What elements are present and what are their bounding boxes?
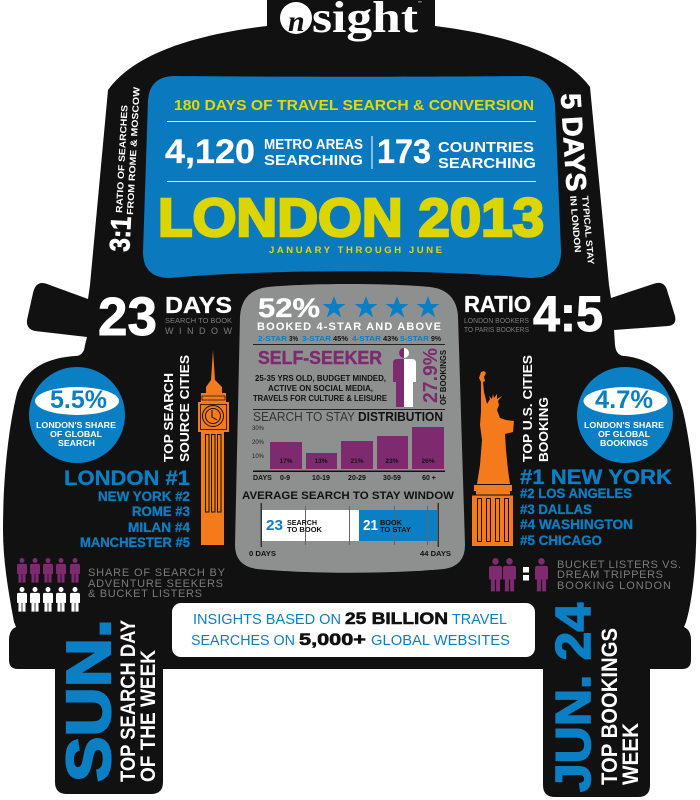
heading: top US cities booking: BOOKING bbox=[536, 397, 551, 462]
bar chart: search to stay distribution: 30-59 bbox=[383, 475, 401, 482]
star rating breakdown: 5-STAR bbox=[400, 334, 430, 343]
bar chart: search to stay distribution: DAYS bbox=[253, 475, 272, 482]
badge: share of global bookings: OF GLOBAL bbox=[598, 429, 650, 439]
list: top US cities bbox=[520, 466, 672, 548]
stat: metro areas bbox=[165, 133, 363, 171]
panel: windshield bbox=[143, 76, 561, 278]
list: top search source cities: MILAN #4 bbox=[128, 519, 190, 535]
callout: insights: 5,000+ bbox=[299, 630, 366, 649]
stat: countries: 173 bbox=[377, 133, 431, 171]
badge: share of global search: 5.5% bbox=[50, 386, 107, 414]
stat: June 24 top bookings week: WEEK bbox=[618, 723, 643, 785]
stat: countries: COUNTRIES bbox=[438, 139, 534, 156]
text: share of search: ADVENTURE SEEKERS bbox=[88, 578, 223, 590]
list: top US cities: #1 NEW YORK bbox=[520, 466, 672, 489]
persona: self-seeker: ACTIVE ON SOCIAL MEDIA, bbox=[268, 384, 373, 393]
stat: metro areas: METRO AREAS bbox=[264, 136, 363, 153]
heading: top search source cities: TOP SEARCH bbox=[161, 373, 176, 462]
timeline bar: search to stay window: 23 bbox=[266, 517, 283, 534]
icon: Big Ben bbox=[198, 350, 229, 545]
bar chart: search to stay distribution: 30% bbox=[252, 426, 265, 432]
stat: ratio 4:5: RATIO bbox=[464, 291, 531, 317]
panel: grey centre dashboard bbox=[235, 284, 465, 573]
badge: share of global bookings: 4.7% bbox=[595, 386, 653, 414]
chart heading: DISTRIBUTION bbox=[358, 409, 443, 424]
badge: share of global bookings: BOOKINGS bbox=[600, 438, 648, 448]
heading: top US cities booking bbox=[520, 355, 551, 462]
star rating breakdown: 3-STAR bbox=[302, 334, 332, 343]
text: bucket listers: DREAM TRIPPERS bbox=[557, 569, 663, 581]
stat: 52 percent: 52% bbox=[258, 293, 320, 323]
list: top search source cities: MANCHESTER #5 bbox=[80, 534, 190, 550]
icon group: purple and white people bbox=[17, 558, 80, 612]
stat: 3:1 ratio: FROM ROME & MOSCOW bbox=[125, 86, 142, 215]
logo bbox=[280, 0, 422, 42]
heading: average search to stay window: AVERAGE SEARCH TO STAY WINDOW bbox=[242, 490, 455, 502]
persona: self-seeker: SELF-SEEKER bbox=[258, 348, 382, 368]
stat: 23 days: WINDOW bbox=[165, 326, 232, 336]
stat: 23 days bbox=[98, 287, 232, 347]
text: bucket listers: BOOKING LONDON bbox=[557, 580, 671, 592]
bar chart: search to stay distribution bbox=[252, 426, 445, 482]
stat: June 24 top bookings week bbox=[547, 603, 643, 792]
callout: insights: INSIGHTS BASED ON bbox=[193, 611, 341, 628]
stat: 3:1 ratio bbox=[104, 86, 142, 252]
badge: share of global search: SEARCH bbox=[58, 438, 95, 448]
title: London 2013: LONDON 2013 bbox=[158, 188, 544, 248]
list: top search source cities: ROME #3 bbox=[132, 503, 190, 519]
list: top US cities: #3 DALLAS bbox=[520, 501, 592, 517]
logo: n bbox=[288, 5, 305, 38]
stat: ratio 4:5: LONDON BOOKERS bbox=[464, 318, 529, 325]
icon: half-filled person bbox=[393, 348, 416, 407]
badge: share of global search bbox=[29, 367, 125, 463]
text: bucket listers: BUCKET LISTERS VS. bbox=[557, 559, 681, 571]
bar chart: search to stay distribution: 0-9 bbox=[280, 475, 290, 482]
persona: self-seeker: 25-35 YRS OLD, BUDGET MINDED, bbox=[255, 374, 386, 383]
stat: 3:1 ratio: 3:1 bbox=[104, 216, 137, 252]
stat: 23 days: SEARCH TO BOOK bbox=[165, 316, 232, 325]
stat: 23 days: DAYS bbox=[165, 292, 232, 318]
star rating breakdown: 9% bbox=[431, 334, 441, 343]
callout: insights: 25 BILLION bbox=[345, 609, 448, 628]
badge: share of global search: LONDON'S SHARE bbox=[36, 420, 116, 430]
stat: 5 days: IN LONDON bbox=[568, 195, 583, 253]
star rating breakdown: 2-STAR bbox=[258, 334, 288, 343]
stat: June 24 top bookings week: TOP BOOKINGS bbox=[597, 628, 622, 785]
stat: 5 days: 5 DAYS bbox=[555, 92, 592, 192]
subtitle: dates: JANUARY THROUGH JUNE bbox=[269, 245, 442, 256]
stat: 3:1 ratio: RATIO OF SEARCHES bbox=[114, 105, 130, 213]
list: top search source cities: LONDON #1 bbox=[64, 467, 190, 490]
text: share of search bbox=[88, 567, 226, 600]
icon: Statue of Liberty bbox=[472, 371, 514, 546]
list: top US cities: #2 LOS ANGELES bbox=[520, 485, 632, 501]
icon group: bucket listers vs dream trippers bbox=[489, 558, 548, 591]
stat: Sunday top search day bbox=[55, 619, 160, 782]
stat: countries bbox=[377, 133, 536, 172]
star rating breakdown: 43% bbox=[383, 334, 398, 343]
stat: 27.9 percent of bookings: 27.9% bbox=[420, 348, 442, 403]
text: share of search: & BUCKET LISTERS bbox=[88, 588, 202, 600]
bar chart: search to stay distribution: 10-19 bbox=[312, 475, 330, 482]
timeline bar: search to stay window: 44 DAYS bbox=[420, 549, 451, 558]
timeline bar: search to stay window: BOOK bbox=[380, 518, 403, 527]
stat: 23 days: 23 bbox=[98, 287, 157, 347]
bar chart: search to stay distribution: 10% bbox=[252, 454, 265, 460]
heading: top search source cities: SOURCE CITIES bbox=[177, 355, 192, 462]
badge: share of global search: OF GLOBAL bbox=[50, 429, 102, 439]
persona: self-seeker: TRAVELS FOR CULTURE & LEISURE bbox=[253, 394, 388, 403]
chart heading: SEARCH TO STAY bbox=[253, 409, 355, 424]
star rating breakdown: 4-STAR bbox=[352, 334, 382, 343]
stat: ratio 4:5 bbox=[464, 286, 603, 342]
stat: metro areas: SEARCHING bbox=[264, 152, 363, 169]
star rating breakdown bbox=[258, 334, 441, 343]
chart heading bbox=[253, 409, 443, 424]
callout: insights bbox=[172, 603, 535, 657]
heading: top search source cities bbox=[161, 355, 192, 462]
stat: Sunday top search day: TOP SEARCH DAY bbox=[117, 620, 140, 782]
bar chart: search to stay distribution: 26% bbox=[421, 458, 435, 465]
bar chart: search to stay distribution: 20-29 bbox=[348, 475, 366, 482]
timeline bar: search to stay window: SEARCH bbox=[287, 518, 317, 527]
callout: insights: SEARCHES ON bbox=[191, 632, 295, 649]
stat: 5 days: TYPICAL STAY bbox=[580, 195, 596, 265]
stat: ratio 4:5: TO PARIS BOOKERS bbox=[464, 327, 529, 334]
callout: insights: GLOBAL WEBSITES bbox=[371, 632, 510, 649]
bar chart: search to stay distribution: 13% bbox=[314, 458, 328, 465]
stat: 52 percent: BOOKED 4-STAR AND ABOVE bbox=[257, 321, 441, 333]
stat: Sunday top search day: OF THE WEEK bbox=[137, 650, 160, 782]
list: top search source cities: NEW YORK #2 bbox=[98, 488, 190, 504]
list: top search source cities bbox=[64, 467, 190, 550]
bar chart: search to stay distribution: 23% bbox=[385, 458, 399, 465]
heading: 180 days: 180 DAYS OF TRAVEL SEARCH & CONVERSION bbox=[174, 97, 534, 114]
stat: 5 days bbox=[555, 92, 596, 265]
list: top US cities: #4 WASHINGTON bbox=[520, 516, 633, 532]
timeline bar: search to stay window: TO STAY bbox=[380, 525, 411, 534]
text: bucket listers bbox=[557, 559, 681, 592]
logo: ™ bbox=[418, 0, 422, 5]
persona: self-seeker bbox=[253, 348, 388, 403]
bar chart: search to stay distribution: 17% bbox=[279, 458, 293, 465]
list: top US cities: #5 CHICAGO bbox=[520, 532, 602, 548]
timeline bar: search to stay window: TO BOOK bbox=[287, 525, 323, 534]
stat: countries: SEARCHING bbox=[438, 155, 536, 172]
badge: share of global bookings bbox=[577, 367, 673, 463]
star rating breakdown: 3% bbox=[289, 334, 298, 343]
stat: ratio 4:5: 4:5 bbox=[533, 286, 603, 342]
badge: share of global bookings: LONDON'S SHARE bbox=[584, 420, 664, 430]
callout: insights: TRAVEL bbox=[452, 611, 507, 628]
timeline bar: search to stay window bbox=[249, 503, 451, 558]
stat: Sunday top search day: SUN. bbox=[55, 619, 124, 782]
bar chart: search to stay distribution: 21% bbox=[350, 458, 364, 465]
timeline bar: search to stay window: 0 DAYS bbox=[249, 549, 276, 558]
timeline bar: search to stay window: 21 bbox=[363, 517, 378, 534]
text: share of search: SHARE OF SEARCH BY bbox=[88, 567, 226, 579]
bar chart: search to stay distribution: 20% bbox=[252, 440, 265, 446]
stat: June 24 top bookings week: JUN. 24 bbox=[547, 603, 601, 792]
bar chart: search to stay distribution: 60 + bbox=[422, 475, 436, 482]
stat: metro areas: 4,120 bbox=[165, 133, 255, 171]
heading: top US cities booking: TOP U.S. CITIES bbox=[520, 355, 535, 462]
stat: 27.9 percent of bookings: OF BOOKINGS bbox=[439, 349, 448, 405]
stat: 52 percent bbox=[257, 293, 441, 333]
star rating breakdown: 45% bbox=[333, 334, 348, 343]
